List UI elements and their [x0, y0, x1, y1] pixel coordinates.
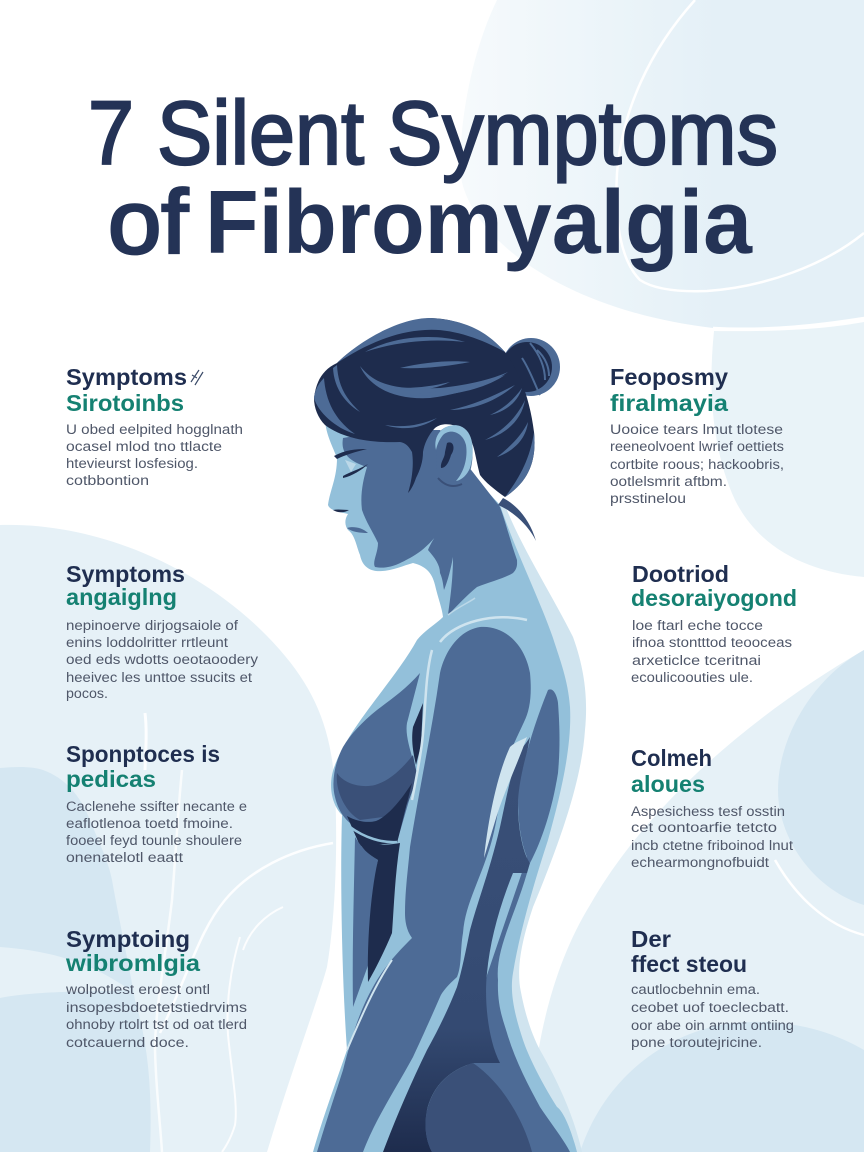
panel: left symptom 1	[66, 364, 243, 488]
panel: right symptom 2: Dootriod	[632, 561, 729, 587]
panel: left symptom 2: oed eds wdotts oeotaoodery	[66, 652, 258, 667]
panel: left symptom 2: enins loddolritter rrtleunt	[66, 635, 228, 650]
face and neck	[343, 430, 517, 615]
panel: right symptom 2: loe ftarl eche tocce	[632, 618, 763, 633]
back and hip	[383, 689, 570, 1152]
title: 7 Silent Symptoms	[88, 84, 778, 184]
panel: left symptom 3: onenatelotl eaatt	[66, 850, 183, 865]
title: Fibromyalgia	[205, 173, 753, 273]
shoulder highlight	[440, 617, 527, 642]
panel: left symptom 4: wibromlgia	[65, 950, 200, 976]
panel: left symptom 3: pedicas	[66, 766, 156, 792]
panel: left symptom 2: heeivec les unttoe ssucits et	[66, 670, 252, 685]
panel: left symptom 1: U obed eelpited hogglnath	[66, 422, 243, 437]
panel: right symptom 4: ceobet uof toeclecbatt.	[631, 1000, 789, 1015]
panel: right symptom 4: pone toroutejricine.	[631, 1035, 762, 1050]
panel: right symptom 2: ifnoa stontttod teooceas	[632, 635, 792, 650]
panel: left symptom 4	[65, 926, 247, 1050]
panel: right symptom 1: prsstinelou	[610, 491, 686, 506]
panel: right symptom 1: cortbite roous; hackoobris,	[610, 457, 784, 472]
title	[88, 84, 778, 273]
panel: left symptom 3: Sponptoces is	[66, 741, 220, 767]
panel: right symptom 4: cautlocbehnin ema.	[631, 982, 760, 997]
panel: left symptom 4: ohnoby rtolrt tst od oat tlerd	[66, 1017, 247, 1032]
panel: left symptom 1: ocasel mlod tno ttlacte	[66, 439, 222, 454]
panel: left symptom 1: cotbbontion	[66, 473, 149, 488]
panel: right symptom 1	[610, 364, 784, 506]
icon: ear	[435, 425, 473, 486]
panel: left symptom 2: angaiglng	[66, 584, 177, 610]
arm highlights	[484, 737, 527, 858]
title: of	[108, 173, 189, 273]
panel: right symptom 4	[631, 926, 794, 1050]
panel: left symptom 3: eaflotlenoa toetd fmoine.	[66, 816, 233, 831]
panel: right symptom 3: cet oontoarfie tetcto	[631, 820, 777, 835]
panel: right symptom 4: ffect steou	[631, 951, 747, 977]
panel: left symptom 3	[66, 741, 247, 865]
panel: right symptom 1: Uooice tears lmut tlotese	[610, 422, 783, 437]
panel: right symptom 3	[631, 745, 793, 870]
panel: left symptom 2: nepinoerve dirjogsaiole of	[66, 618, 238, 633]
panel: left symptom 4: insopesbdoetetstiedrvims	[66, 1000, 247, 1015]
panel: right symptom 2	[631, 561, 797, 685]
panel: left symptom 4: cotcauernd doce.	[66, 1035, 189, 1050]
panel: right symptom 1: ootlelsmrit aftbm.	[610, 474, 727, 489]
panel: left symptom 2: Symptoms	[66, 561, 185, 587]
chest and torso front	[333, 673, 423, 1007]
body halo	[480, 505, 586, 1152]
panel: right symptom 3: Colmeh	[631, 745, 712, 771]
panel: left symptom 1: Symptoms	[66, 364, 187, 390]
panel: left symptom 4: wolpotlest eroest ontl	[65, 982, 210, 997]
body light base	[313, 420, 577, 1152]
panel: left symptom 1: htevieurst losfesiog.	[66, 456, 198, 471]
panel: right symptom 3: Aspesichess tesf osstin	[631, 804, 785, 819]
panel: right symptom 3: aloues	[631, 771, 705, 797]
figure: woman in profile	[313, 318, 586, 1152]
icon: small slashes	[191, 370, 203, 385]
hair highlights	[337, 318, 505, 363]
panel: right symptom 3: incb ctetne friboinod lnut	[631, 838, 793, 853]
panel: right symptom 1: firalmayia	[610, 390, 728, 416]
panel: left symptom 3: Caclenehe ssifter necante e	[66, 799, 247, 814]
panel: right symptom 2: desoraiyogond	[631, 585, 797, 611]
hair	[314, 318, 560, 541]
panel: right symptom 4: oor abe oin arnmt ontiing	[631, 1018, 794, 1033]
panel: left symptom 4: Symptoing	[66, 926, 190, 952]
panel: right symptom 4: Der	[631, 926, 671, 952]
panel: right symptom 2: ecoulicoouties ule.	[631, 670, 753, 685]
panel: right symptom 1: reeneolvoent lwrief oettiets	[610, 439, 784, 454]
arm	[317, 627, 531, 1152]
panel: left symptom 2	[66, 561, 258, 701]
panel: left symptom 1: Sirotoinbs	[66, 390, 184, 416]
panel: right symptom 3: echearmongnofbuidt	[631, 855, 769, 870]
icon: closed eye and lips	[333, 449, 368, 533]
panel: left symptom 3: fooeel feyd tounle shoulere	[66, 833, 242, 848]
panel: right symptom 1: Feoposmy	[610, 364, 728, 390]
panel: left symptom 2: pocos.	[66, 686, 108, 701]
panel: right symptom 2: arxeticlce tceritnai	[632, 653, 761, 668]
